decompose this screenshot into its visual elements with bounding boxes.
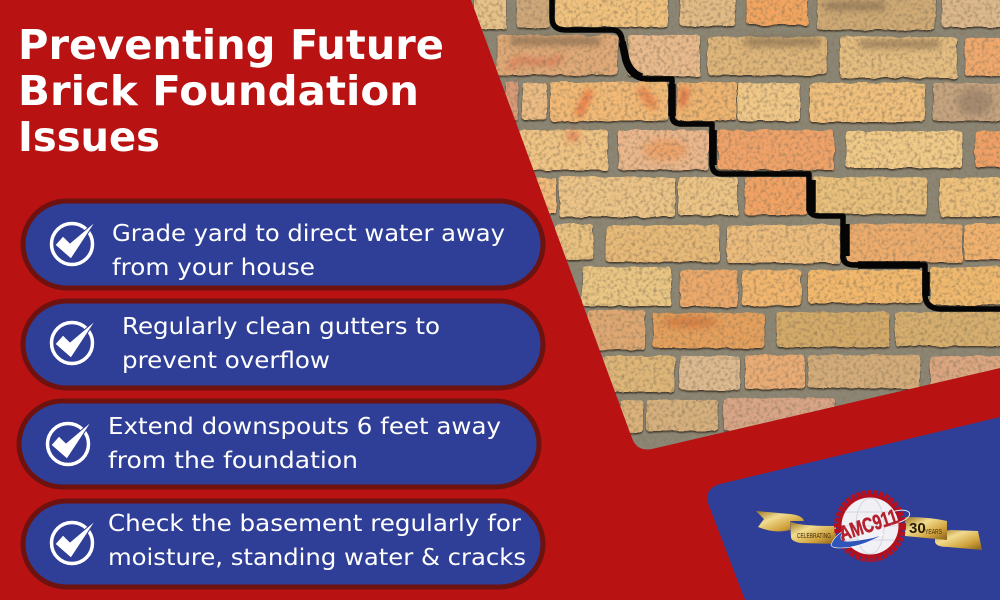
title [18, 21, 444, 161]
ribbon left: CELEBRATING [797, 533, 831, 540]
title: Brick Foundation [18, 67, 419, 115]
icon: check mark [52, 221, 96, 264]
logo: AMC911 celebrating 30 years [756, 494, 982, 558]
tip text: prevent overflow [122, 346, 330, 374]
tip text [112, 219, 505, 281]
title: Preventing Future [18, 21, 444, 69]
photo: cracked brick wall [460, 0, 1000, 460]
brick stains [510, 2, 993, 328]
panel: extend downspouts tip [19, 401, 539, 487]
tip text [108, 412, 501, 474]
panel: logo background [707, 417, 1000, 600]
tip text [108, 509, 526, 571]
tip text: Extend downspouts 6 feet away [108, 412, 501, 440]
tip text: Check the basement regularly for [108, 509, 521, 537]
tip text: moisture, standing water & cracks [108, 543, 526, 571]
tip text: from your house [112, 253, 315, 281]
panel: check basement tip [23, 501, 543, 587]
rosette: AMC911 [836, 505, 901, 546]
icon: check mark [52, 320, 96, 364]
title: Issues [18, 113, 160, 161]
tip text: Regularly clean gutters to [122, 312, 440, 340]
tip text: from the foundation [108, 446, 358, 474]
icon: check mark [52, 520, 96, 564]
icon: check mark [48, 421, 92, 464]
tip text: Grade yard to direct water away [112, 219, 505, 247]
foundation crack [552, 0, 1000, 309]
tip text [122, 312, 440, 374]
panel: grade yard tip [23, 201, 543, 288]
rosette [831, 494, 911, 558]
panel: clean gutters tip [23, 301, 543, 388]
ribbon left [756, 511, 836, 544]
ribbon right [905, 517, 982, 550]
ribbon right: 30 [909, 520, 926, 537]
ribbon right: YEARS [925, 529, 942, 536]
